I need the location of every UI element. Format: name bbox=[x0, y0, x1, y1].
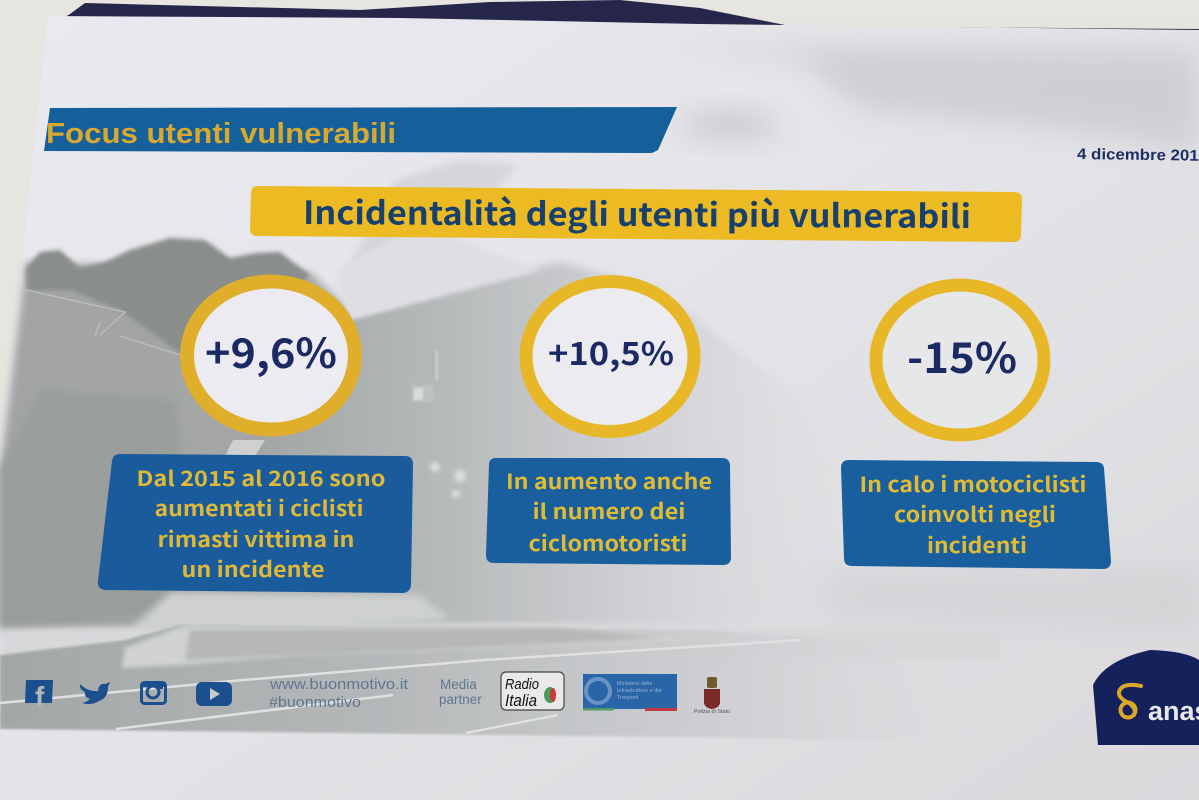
headlight glows bbox=[430, 462, 466, 498]
footer: social icons and partner logos bbox=[25, 672, 730, 715]
website and hashtag: #buonmotivo bbox=[269, 694, 361, 711]
media partner label: Media bbox=[440, 677, 477, 692]
trees bbox=[26, 238, 310, 360]
icon: facebook bbox=[25, 680, 53, 712]
heading text: Incidentalità degli utenti più vulnerabili bbox=[303, 188, 971, 238]
icon: facebook: f bbox=[35, 681, 45, 712]
logo: Ministero delle Infrastrutture e dei Trasporti: Ministero delle bbox=[617, 681, 652, 687]
caption box: moped riders: ciclomotoristi bbox=[528, 528, 688, 558]
caption box: motorcyclists: coinvolti negli bbox=[894, 499, 1056, 529]
title text: Focus utenti vulnerabili bbox=[46, 118, 396, 150]
stat circle: cyclists: +9,6% bbox=[205, 320, 337, 380]
logo: Radio Italia: Italia bbox=[505, 691, 537, 710]
website and hashtag bbox=[269, 676, 409, 711]
caption box: moped riders bbox=[486, 458, 731, 565]
media partner label: partner bbox=[439, 692, 482, 707]
road sign bbox=[412, 350, 438, 402]
background photo: faded road scene bbox=[0, 160, 1000, 745]
road lines bbox=[0, 640, 800, 733]
icon: anas swirl bbox=[1119, 685, 1141, 718]
logo: anas bbox=[1093, 650, 1199, 745]
caption box: cyclists: aumentati i ciclisti bbox=[154, 493, 364, 523]
lighter road strips bbox=[225, 440, 265, 456]
stat circle: moped riders bbox=[526, 282, 694, 432]
faint structure behind heading bbox=[330, 160, 520, 300]
icon: youtube bbox=[196, 682, 232, 706]
stat circle: cyclists bbox=[187, 282, 355, 430]
road band bbox=[0, 624, 1000, 660]
caption box: cyclists bbox=[98, 454, 413, 593]
stat circle: moped riders: +10,5% bbox=[548, 329, 674, 375]
logo: Ministero delle Infrastrutture e dei Trasporti bbox=[583, 674, 677, 711]
logo: Ministero delle Infrastrutture e dei Trasporti: Infrastrutture e dei bbox=[617, 688, 662, 694]
logo: Polizia di Stato bbox=[694, 677, 730, 715]
caption box: cyclists: un incidente bbox=[182, 554, 324, 584]
caption box: motorcyclists: incidenti bbox=[927, 530, 1027, 560]
paper shading and creases bbox=[650, 45, 1199, 630]
website and hashtag: www.buonmotivo.it bbox=[269, 676, 409, 693]
caption box: motorcyclists: In calo i motociclisti bbox=[860, 469, 1086, 499]
embankment and overpass field bbox=[0, 262, 920, 630]
stat circle: motorcyclists: -15% bbox=[907, 325, 1017, 386]
logo: Ministero delle Infrastrutture e dei Trasporti: Trasporti bbox=[617, 695, 638, 701]
logo: Radio Italia: Radio bbox=[505, 676, 539, 693]
caption box: moped riders: il numero dei bbox=[532, 496, 686, 526]
darker slope bbox=[0, 390, 200, 630]
stat circle: motorcyclists bbox=[876, 285, 1044, 435]
date: 4 dicembre 2017 bbox=[1077, 146, 1199, 165]
title bar bbox=[44, 107, 677, 153]
icon: twitter bbox=[80, 682, 110, 704]
logo: Polizia di Stato: Polizia di Stato bbox=[694, 709, 730, 715]
caption box: cyclists: rimasti vittima in bbox=[158, 524, 354, 554]
icon: instagram bbox=[142, 682, 166, 704]
logo: Radio Italia bbox=[501, 672, 564, 710]
media partner label bbox=[439, 677, 482, 707]
caption box: motorcyclists bbox=[841, 460, 1111, 569]
caption box: moped riders: In aumento anche bbox=[506, 466, 712, 496]
dark sheet behind the paper bbox=[60, 0, 1199, 33]
heading banner bbox=[250, 186, 1022, 242]
guard rail bbox=[26, 290, 180, 355]
caption box: cyclists: Dal 2015 al 2016 sono bbox=[136, 463, 386, 493]
